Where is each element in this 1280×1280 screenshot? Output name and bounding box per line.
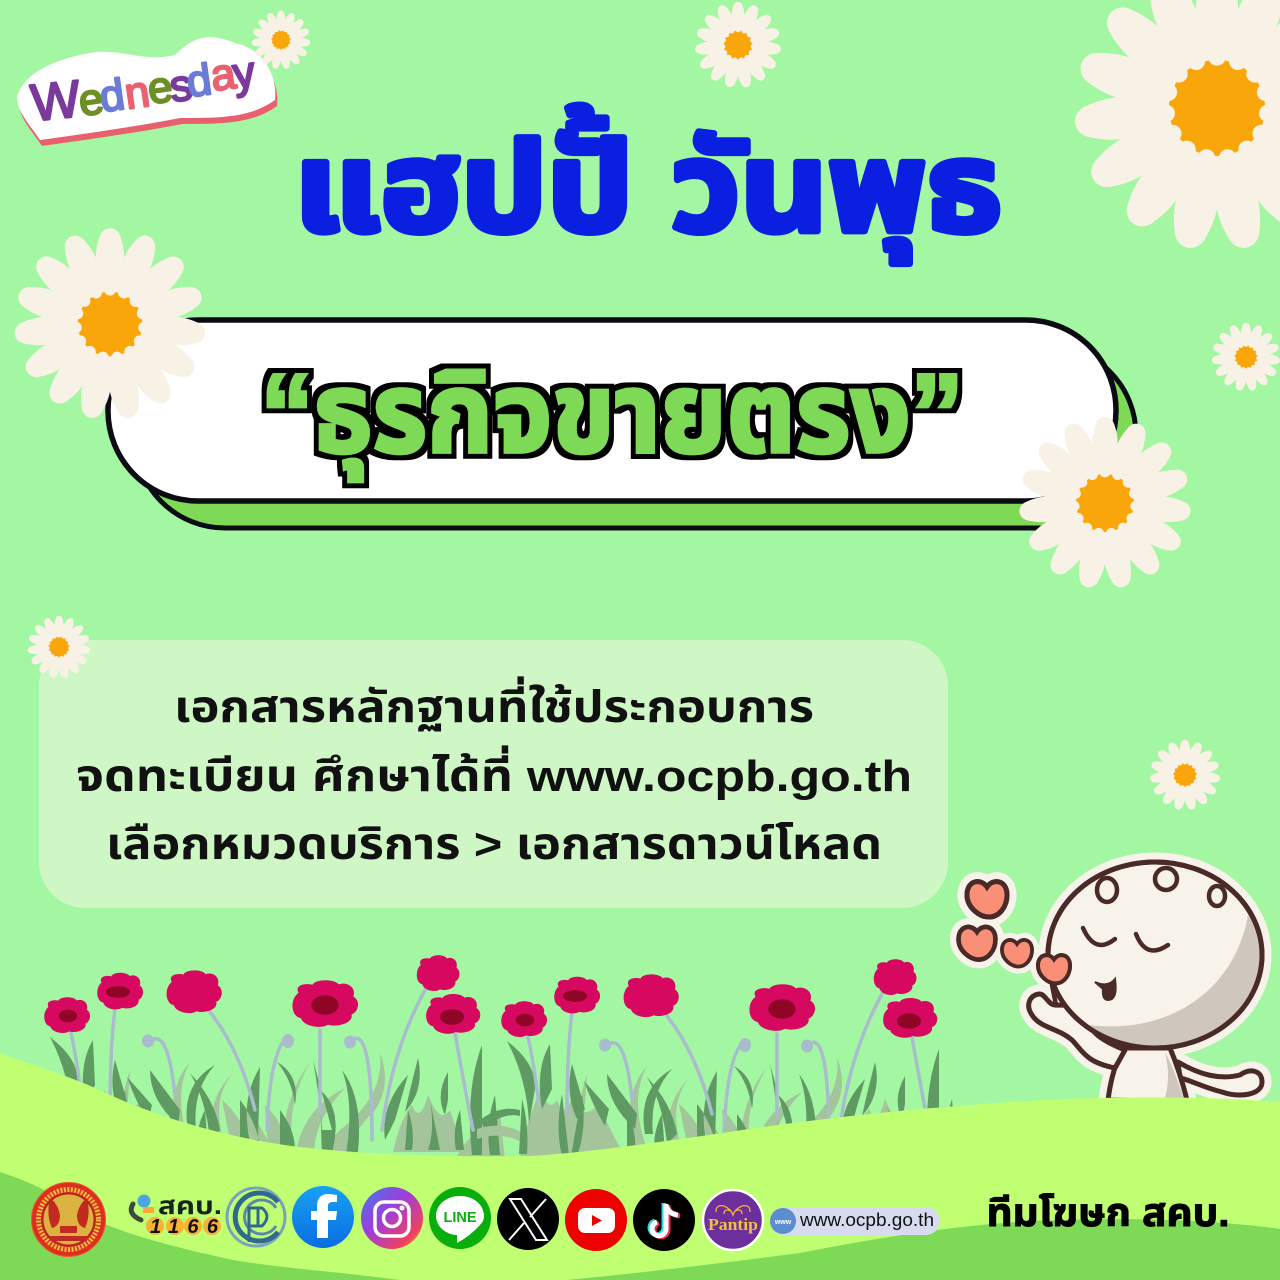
badge: Wednesday [17,37,277,146]
icon: Pantip: Pantip [708,1215,758,1234]
logo: hotline 1166: สคบ. [158,1192,222,1220]
panel: topic banner [108,320,1136,528]
flower: top small [251,11,311,70]
icon: TikTok [633,1189,695,1251]
icon: YouTube [565,1189,627,1251]
footer label: ทีมโฆษก สคบ. [986,1192,1230,1235]
text line 3: เลือกหมวดบริการ > เอกสารดาวน์โหลด [106,820,882,869]
label: Wednesday lettering: W [28,70,83,133]
flower: banner right [1018,417,1192,590]
banner heading: “ธุรกิจขายตรง” [260,351,964,481]
title: แฮปปั้ วันพุธ [294,104,1002,264]
panel: information [39,640,948,908]
icon: LINE: LINE [444,1210,477,1226]
meadow: poppies and grass right [477,959,977,1164]
meadow: poppies and grass left [20,955,520,1160]
logo: agency seal [32,1182,106,1256]
website pill [770,1207,940,1235]
website pill: www [774,1219,792,1226]
hill: lower green left [0,1172,400,1280]
website pill: www.ocpb.go.th [799,1210,934,1230]
logo: hotline 1166: 1166 [150,1216,219,1238]
label: Wednesday lettering: y [230,47,258,99]
hill: lime [0,1053,1280,1280]
flower: right small [1211,323,1280,392]
icon: LINE [429,1187,491,1249]
label: Wednesday lettering: a [208,49,239,101]
text line 1: เอกสารหลักฐานที่ใช้ประกอบการ [174,676,814,732]
icon: Pantip [703,1190,763,1250]
icon: X [497,1188,559,1250]
label: Wednesday lettering: d [97,70,128,122]
hill: lower green right [567,1219,1280,1280]
character blowing hearts [959,862,1262,1100]
logo: OCPB circle [227,1188,285,1246]
label: Wednesday lettering: s [167,60,195,112]
flower: right of panel [1149,740,1221,810]
text line 2: จดทะเบียน ศึกษาได้ที่ www.ocpb.go.th [76,745,912,801]
icon: Facebook [292,1186,354,1248]
label: Wednesday lettering: e [145,62,176,114]
flower: top centre [695,2,781,88]
flower: panel corner [27,616,91,679]
logo: hotline 1166 [131,1192,222,1238]
label: Wednesday lettering: e [76,74,107,126]
icon: Instagram [361,1187,423,1249]
label: Wednesday lettering: n [122,67,153,119]
flower: top right large [1073,0,1280,252]
label: Wednesday lettering: d [184,55,215,107]
flower: banner left [13,228,207,421]
